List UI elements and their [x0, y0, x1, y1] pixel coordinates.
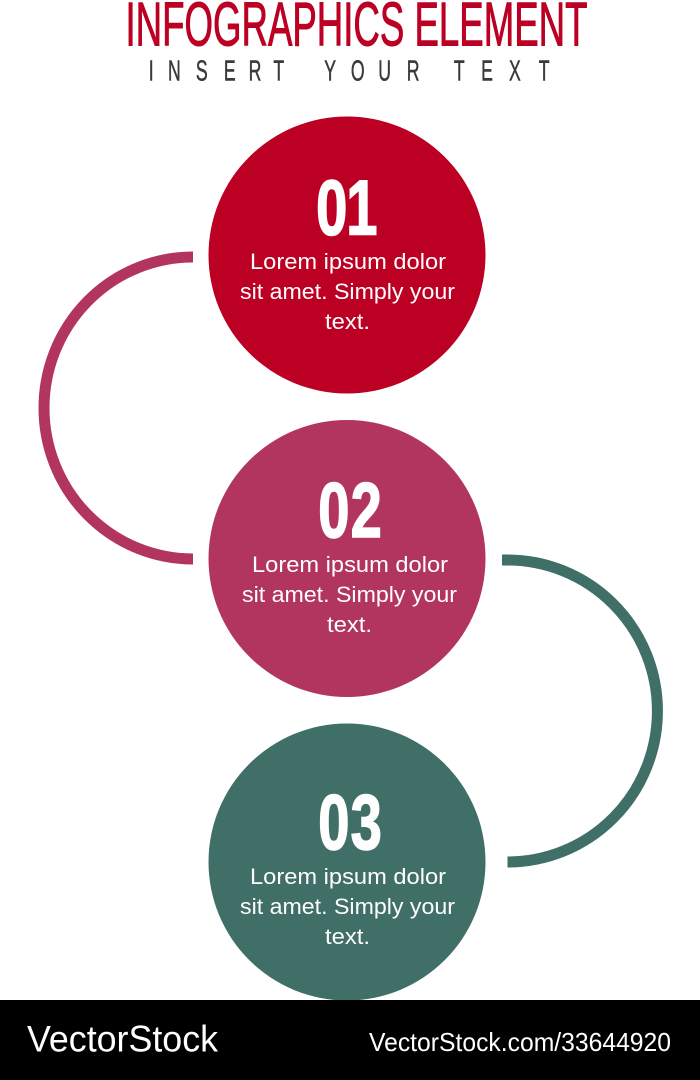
step 02 text: Lorem ipsum dolor: [252, 552, 448, 577]
step 01 text: Lorem ipsum dolor: [250, 249, 446, 274]
step 01 text: [240, 249, 455, 334]
step 03 number: 03: [318, 779, 382, 866]
step 01 disc: [208, 116, 486, 394]
step 03 text: Lorem ipsum dolor: [250, 864, 446, 889]
footer band: [0, 1000, 700, 1080]
step 02 disc: [208, 420, 486, 697]
step 02 text: [242, 552, 457, 637]
step 02 number: 02: [318, 467, 382, 554]
step 03 disc: [208, 724, 486, 1000]
connector arc: right: [502, 560, 657, 862]
step 01 text: text.: [325, 309, 370, 334]
subtitle: INSERTYOURTEXT: [149, 56, 550, 88]
step 01 text: sit amet. Simply your: [240, 279, 455, 304]
step 01 number: 01: [316, 164, 378, 252]
step 03 text: text.: [325, 924, 370, 949]
step 03: [208, 724, 486, 1000]
step 02 text: text.: [327, 612, 372, 637]
step 03 text: sit amet. Simply your: [240, 894, 455, 919]
step 01: [208, 116, 486, 394]
step 02: [208, 420, 486, 697]
step 02 text: sit amet. Simply your: [242, 582, 457, 607]
step 03 text: [240, 864, 455, 949]
footer background: [0, 1000, 700, 1080]
footer image id: VectorStock.com/33644920: [369, 1027, 671, 1057]
connector arc: left: [44, 257, 193, 559]
footer logo: VectorStock: [27, 1018, 218, 1060]
